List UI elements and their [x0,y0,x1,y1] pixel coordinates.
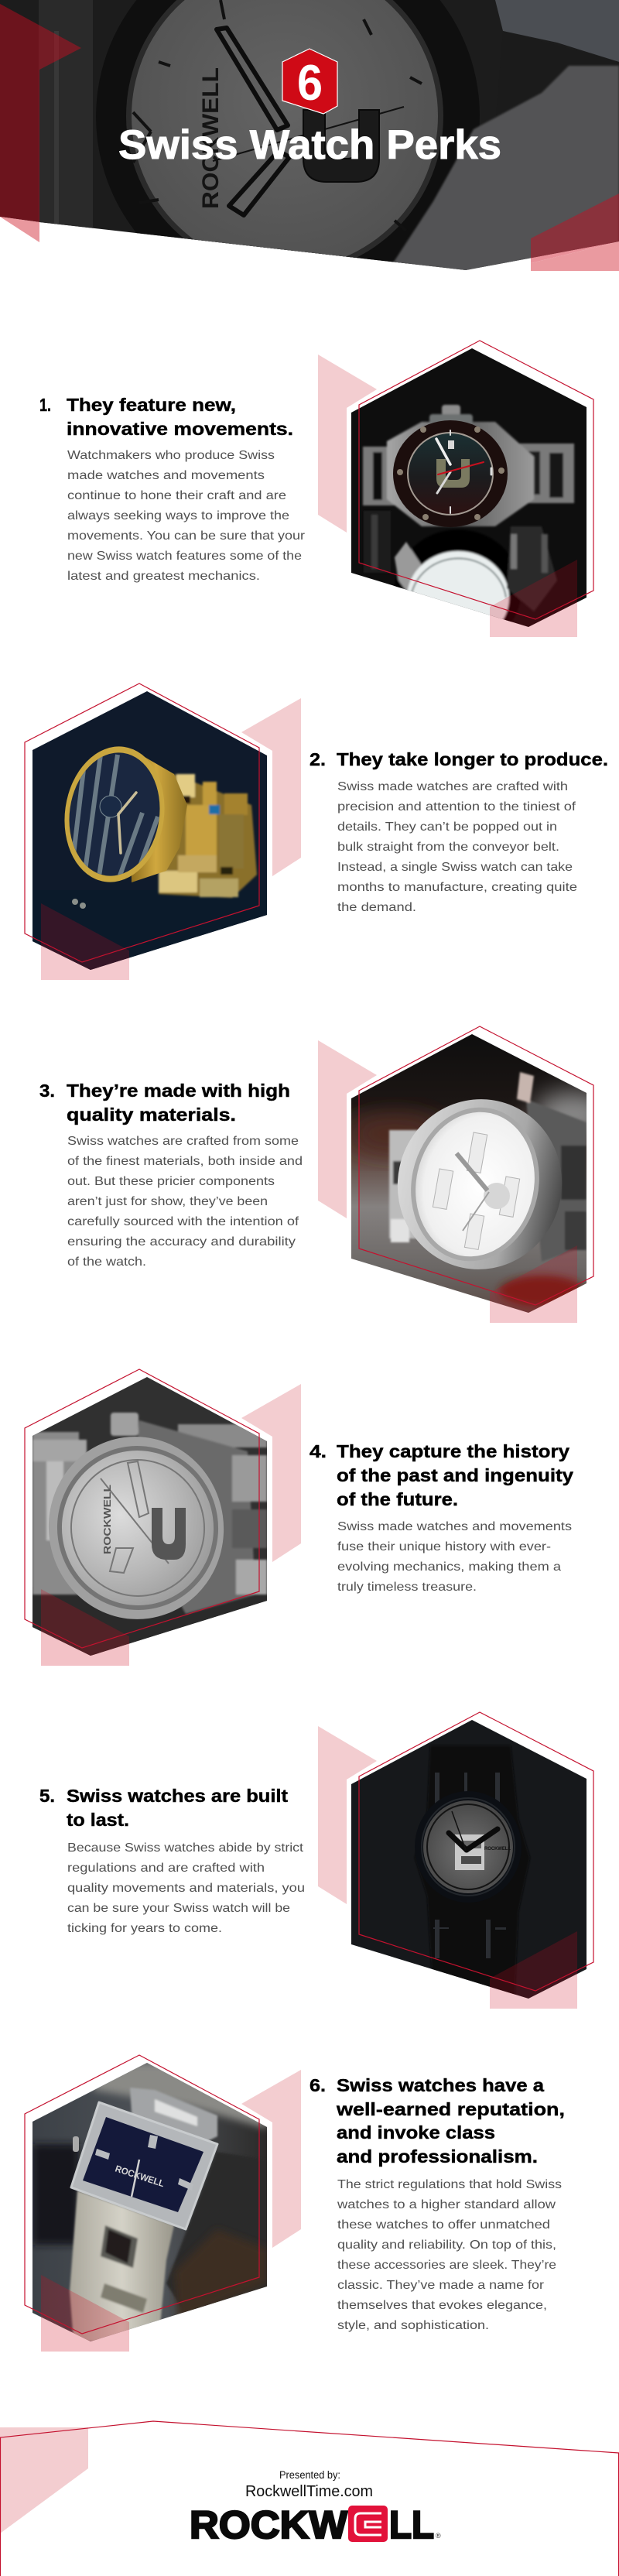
body text 2: Swiss made watches are crafted with [337,780,568,793]
body text 4 [337,1520,572,1594]
pink overlay shape on photo 5 [490,1931,577,2009]
decorative red triangle: header top left [0,4,81,222]
pink shape behind photo 1 [318,355,377,533]
body text 4: Swiss made watches and movements [337,1520,572,1533]
body text 6: style, and sophistication. [337,2319,489,2332]
red hexagon outline 5 [359,1712,593,1991]
body text 5: can be sure your Swiss watch will be [67,1902,290,1915]
heading 3: They’re made with high [67,1081,290,1101]
body text 5: Because Swiss watches abide by strict [67,1841,304,1855]
body text 6: these watches to offer unmatched [337,2218,550,2232]
body text 3: aren’t just for show, they’ve been [67,1195,268,1208]
logo: Rockwell: LL [389,2503,434,2547]
heading 3: quality materials. [67,1105,236,1125]
panel: perk 5 [39,1712,593,2009]
body text 4: fuse their unique history with ever- [337,1540,551,1553]
red hexagon outline 1 [359,341,593,619]
heading 2: 2. [310,749,326,769]
panel: footer [0,2421,619,2576]
website text: RockwellTime.com [245,2483,373,2500]
body text 5 [67,1841,305,1935]
body text 6 [337,2178,562,2332]
red hexagon outline 2 [25,683,259,962]
red footer outline [0,2421,619,2576]
heading 6: Swiss watches have a [337,2075,545,2095]
body text 2: bulk straight from the conveyor belt. [337,841,559,854]
body text 1 [67,449,306,583]
body text 2 [337,780,577,914]
heading 4: of the future. [337,1489,458,1509]
photo: black watch: ROCKWELL [484,1847,511,1852]
body text 3: Swiss watches are crafted from some [67,1135,299,1148]
heading 6: well-earned reputation, [336,2099,565,2119]
body text 6: classic. They’ve made a name for [337,2279,545,2292]
body text 1: new Swiss watch features some of the [67,550,302,563]
decorative pink triangle: header bottom left [0,217,39,242]
body text 2: months to manufacture, creating quite [337,881,577,894]
heading 1: innovative movements. [67,419,293,439]
body text 2: Instead, a single Swiss watch can take [337,861,573,874]
heading 5 [39,1786,288,1830]
pink overlay shape on photo 2 [41,903,129,980]
body text 6: The strict regulations that hold Swiss [337,2178,562,2191]
body text 3: out. But these pricier components [67,1175,275,1188]
photo: square steel watch: ROCKWELL [114,2163,166,2189]
photo: silver watch with white dial [351,1034,587,1313]
body text 1: made watches and movements [67,469,265,482]
body text 1: latest and greatest mechanics. [67,570,260,583]
body text 1: continue to hone their craft and are [67,489,286,502]
heading 5: Swiss watches are built [67,1786,288,1806]
pink overlay shape on photo 4 [41,1589,129,1666]
heading 4 [310,1441,573,1509]
body text 3: ensuring the accuracy and durability [67,1235,296,1249]
body text 5: ticking for years to come. [67,1922,222,1935]
body text 2: details. They can’t be popped out in [337,820,557,834]
body text 4: evolving mechanics, making them a [337,1560,561,1574]
heading 4: They capture the history [337,1441,569,1461]
logo: Rockwell: ROCKW [190,2503,348,2547]
logo: Rockwell [190,2503,441,2547]
panel: perk 1 [39,341,593,650]
pink shape behind photo 4 [241,1384,301,1562]
panel: perk 6 [25,2055,565,2352]
heading 3: 3. [39,1081,55,1101]
presented by text: Presented by: [279,2469,340,2481]
pink shape behind photo 3 [318,1040,377,1218]
heading 1: 1. [39,395,51,415]
photo: black and white silver watch [32,1377,267,1656]
body text 5: quality movements and materials, you [67,1882,305,1895]
photo: steel and black watch [351,348,587,650]
body text 1: Watchmakers who produce Swiss [67,449,275,462]
decorative red shape: header bottom right [531,194,619,263]
panel: perk 4 [25,1369,573,1666]
heading 1: They feature new, [67,395,236,415]
heading 6: and invoke class [337,2122,495,2143]
body text 2: precision and attention to the tiniest of [337,800,576,814]
red hexagon outline 3 [359,1026,593,1305]
body text 3 [67,1135,303,1269]
heading 5: to last. [67,1810,129,1830]
pink shape behind photo 6 [241,2070,301,2248]
pink overlay shape on photo 1 [490,560,577,637]
title: Swiss Watch Perks [118,122,501,168]
logo: Rockwell: ® [436,2532,441,2540]
panel: header photo banner: ROCKWELL [198,67,224,209]
body text 6: quality and reliability. On top of this, [337,2239,556,2252]
body text 6: these accessories are sleek. They’re [337,2259,556,2272]
pink shape in footer [0,2427,88,2533]
heading 6: and professionalism. [337,2146,538,2167]
body text 5: regulations and are crafted with [67,1862,265,1875]
heading 2: They take longer to produce. [337,749,608,769]
heading 4: of the past and ingenuity [337,1465,573,1485]
body text 6: themselves that evokes elegance, [337,2299,547,2312]
body text 3: carefully sourced with the intention of [67,1215,299,1228]
red hexagon outline 4 [25,1369,259,1648]
pink shape behind photo 2 [241,698,301,876]
body text 4: truly timeless treasure. [337,1581,477,1594]
pink overlay shape on photo 3 [490,1245,577,1323]
body text 6: watches to a higher standard allow [337,2198,556,2211]
body text 3: of the watch. [67,1255,146,1269]
photo: black and white silver watch: ROCKWELL [101,1485,113,1554]
panel: perk 3 [39,1026,611,1323]
body text 2: the demand. [337,901,416,914]
panel: header photo banner [0,0,619,270]
heading 5: 5. [39,1786,55,1806]
photo: gold watch [32,691,267,970]
pink shape behind photo 5 [318,1726,377,1904]
badge: number 6 hexagon: 6 [297,54,323,111]
heading 3 [39,1081,290,1125]
photo: square steel watch [32,2063,267,2341]
decorative pink shape: header bottom right [531,242,619,271]
panel: perk 2 [25,683,608,980]
body text 1: movements. You can be sure that your [67,529,306,543]
red hexagon outline 6 [25,2055,259,2334]
heading 4: 4. [310,1441,327,1461]
heading 1 [39,395,293,439]
body text 1: always seeking ways to improve the [67,509,289,522]
heading 6: 6. [310,2075,326,2095]
body text 3: of the finest materials, both inside and [67,1155,303,1168]
photo: black watch [351,1720,587,1999]
heading 6 [310,2075,565,2167]
badge: number 6 hexagon [282,49,337,114]
pink overlay shape on photo 6 [41,2275,129,2352]
